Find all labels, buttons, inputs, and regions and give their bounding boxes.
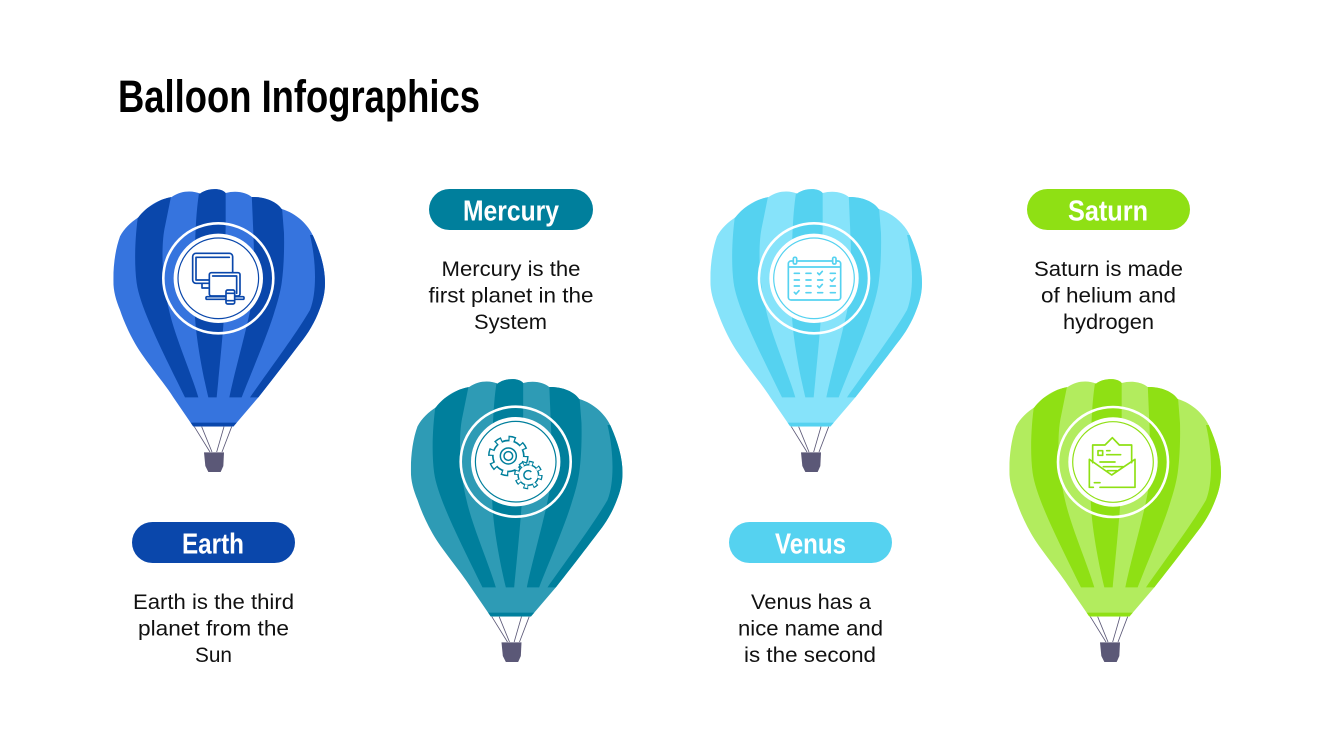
text: Earth: Sun: [195, 643, 232, 667]
pill: Mercury: Mercury: [463, 196, 559, 228]
text: Saturn: of helium and: [1041, 284, 1176, 308]
text: Saturn: hydrogen: [1063, 310, 1154, 334]
balloon: Saturn (green): [1009, 379, 1221, 662]
balloon: Earth (blue): [100, 180, 340, 472]
pill: Mercury: [429, 189, 593, 230]
balloon: Venus (light blue): [697, 180, 937, 472]
pill: Saturn: Saturn: [1068, 196, 1148, 228]
icon ring: [461, 407, 571, 517]
text: Mercury: first planet in the: [428, 284, 594, 308]
text: Saturn: Saturn is made: [1034, 257, 1183, 281]
icon: calendar: [788, 257, 841, 300]
icon: devices: [193, 253, 244, 304]
icon ring: [759, 223, 869, 333]
icon ring: [163, 223, 273, 333]
balloon: Mercury (teal): [410, 379, 622, 662]
text: Mercury: Mercury is the: [442, 257, 580, 281]
text: Saturn: [1034, 257, 1183, 334]
text: Venus: nice name and: [738, 616, 883, 640]
text: Venus: is the second: [744, 643, 876, 667]
pill: Earth: [132, 522, 295, 563]
text: Mercury: System: [474, 310, 547, 334]
text: Venus: Venus has a: [751, 590, 871, 614]
title: Balloon Infographics: [118, 71, 480, 122]
pill: Saturn: [1027, 189, 1190, 230]
icon ring: [1058, 407, 1168, 517]
pill: Venus: Venus: [775, 528, 846, 560]
text: Earth: Earth is the third: [133, 590, 294, 614]
text: Earth: [133, 590, 294, 667]
icon: envelope: [1089, 438, 1135, 487]
text: Venus: [738, 590, 883, 667]
pill: Earth: Earth: [182, 528, 244, 560]
text: Mercury: [428, 257, 594, 334]
pill: Venus: [729, 522, 892, 563]
icon: gears: [492, 439, 540, 486]
text: Earth: planet from the: [138, 616, 289, 640]
